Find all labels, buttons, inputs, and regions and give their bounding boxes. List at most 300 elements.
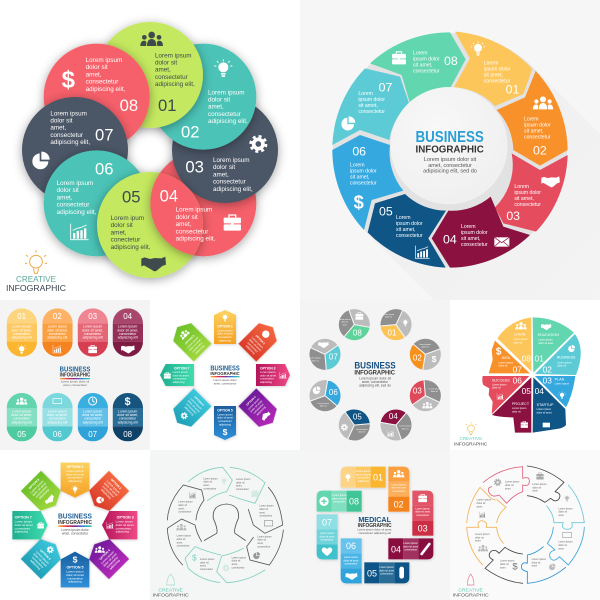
icon: chart: [415, 246, 430, 258]
panel: puzzle outline circle: [453, 466, 584, 599]
center title: amet, consectetur: [63, 383, 87, 387]
logo: [454, 422, 488, 446]
outline text: consectetur: [203, 487, 216, 490]
tab 01: dolor sit amet: [356, 473, 371, 476]
outline text: amet,: [178, 507, 185, 510]
tab 02: dolor sit amet: [391, 487, 406, 490]
text 06: Lorem ipsum: [57, 180, 93, 187]
head small text: [492, 338, 572, 414]
head numbers: 07: [513, 365, 522, 375]
tag option 1: consectetur: [218, 335, 232, 339]
segment labels: consectetur: [350, 180, 377, 186]
head small text: Lorem ipsum: [513, 338, 528, 341]
circle 02: [150, 44, 256, 150]
head numbers: [513, 353, 552, 396]
head labels: LOGIN: [514, 333, 526, 337]
tag option 6: consectetur: [31, 555, 45, 569]
center title: consectetur adipiscing elit: [358, 531, 391, 535]
circle group 07: [298, 327, 348, 380]
outline text: dolor sit: [232, 560, 241, 563]
puzzle text: amet: [475, 540, 481, 543]
tag option 1: OPTION 1: [66, 465, 84, 469]
icon: dollar: $: [62, 66, 75, 93]
text 07: dolor sit: [50, 118, 73, 125]
pill 07: dolor sit amet,: [82, 413, 103, 417]
tab 04: 04: [391, 544, 401, 554]
pill 02: consectetur: [49, 332, 67, 336]
text 05: 05: [122, 188, 141, 207]
head segment startup: [533, 377, 566, 433]
segment labels: Lorem: [484, 60, 498, 66]
tab 08: 08: [349, 496, 359, 506]
head labels: STARTUP: [537, 403, 554, 407]
icon: bulb: [214, 59, 232, 77]
text 08: Lorem ipsum: [86, 57, 122, 64]
logo: [153, 574, 189, 599]
tag option 1: [61, 463, 89, 498]
tag option 1: dolor sit amet: [217, 332, 233, 336]
tag option 3: [256, 364, 290, 386]
tag option 2: [238, 318, 282, 362]
text 06: 06: [95, 160, 114, 179]
outline text: Lorem ipsum: [203, 477, 218, 480]
center title: INFOGRAPHIC: [60, 373, 90, 379]
head labels: BUSINESS: [557, 356, 576, 360]
circle group 02: [403, 328, 451, 379]
tag option 8: adipiscing: [38, 488, 50, 500]
pill 02: dolor sit amet,: [47, 328, 68, 332]
text 06: adipiscing elit,: [57, 209, 97, 216]
outline text: consectetur: [178, 511, 191, 514]
tab 04: dolor sit amet: [403, 545, 418, 548]
logo: creative infographic: INFOGRAPHIC: [6, 283, 66, 293]
center title: [58, 514, 92, 536]
tag option 8: [168, 318, 212, 362]
tab 02: consectetur: [392, 490, 405, 493]
outline text: Lorem ipsum: [257, 535, 272, 538]
head small text: dolor sit: [513, 341, 522, 344]
tag option 3: dolor sit amet: [116, 523, 134, 527]
segment numbers: 04: [443, 232, 457, 246]
text 07: adipiscing elit,: [50, 139, 90, 146]
head small text: dolor sit: [557, 365, 566, 368]
tab 05: [364, 562, 409, 583]
outline text: amet,: [203, 484, 210, 487]
segment labels: ipsum dolor: [514, 190, 541, 196]
text 07: consectetur: [50, 132, 83, 139]
head numbers: 08: [522, 353, 531, 363]
puzzle text: amet: [558, 514, 564, 517]
icon: bulb: [471, 41, 485, 56]
tag option 1: [214, 310, 236, 344]
tag option 4: [84, 534, 129, 579]
pill 04: [113, 308, 143, 357]
center title: Lorem ipsum dolor sit amet,: [357, 528, 392, 532]
tag option 8: Lorem ipsum: [186, 335, 200, 349]
text 03: [185, 157, 253, 193]
outline text: [177, 477, 274, 571]
circle 04 overlap over 05: [144, 172, 203, 262]
text 07: [50, 110, 114, 146]
tag option 2: adipiscing: [100, 488, 112, 500]
numbers: 07: [329, 353, 338, 362]
numbers: [329, 328, 422, 421]
icon: briefcase: [224, 215, 241, 231]
pill 05: Lorem ipsum: [12, 409, 32, 413]
tag option 5: adipiscing: [68, 580, 82, 584]
tab 03: Lorem ipsum: [415, 507, 430, 510]
numbers: 01: [388, 329, 397, 338]
text 04: 04: [160, 186, 178, 205]
head labels: IDEA: [502, 356, 511, 360]
outline text: Lorem ipsum: [177, 535, 191, 538]
tag option 3: dolor sit amet: [260, 373, 276, 377]
tab 06: [341, 538, 362, 583]
text 08: consectetur: [86, 79, 118, 86]
tab 01: Lorem ipsum: [356, 470, 371, 473]
text 03: adipiscing elit,: [213, 186, 253, 193]
head segment idea: [489, 341, 530, 373]
person outline: [204, 504, 246, 541]
logo: INFOGRAPHIC: [454, 441, 488, 446]
numbers: 03: [413, 387, 422, 396]
segment labels: ipsum dolor: [350, 168, 377, 174]
logo: CREATIVE: [158, 587, 184, 593]
puzzle text: dolor sit: [532, 486, 541, 489]
tab 05: consectetur: [380, 573, 393, 576]
pill 05: adipiscing elit: [12, 420, 32, 424]
tab 02: 02: [394, 499, 404, 509]
center title: MEDICAL: [358, 515, 391, 524]
panel: head infographic: [454, 317, 581, 446]
icon: dollar: $: [354, 192, 364, 213]
center title: amet, consectetur: [362, 380, 389, 384]
pill 01: [7, 308, 37, 357]
segment labels: ipsum dolor: [413, 57, 440, 63]
tag option 3: adipiscing: [116, 530, 129, 534]
panel: option tags octagon small: [160, 310, 290, 440]
head segment success: [482, 376, 529, 414]
pill 04: dolor sit amet,: [117, 328, 138, 332]
pill 08: adipiscing elit: [118, 420, 138, 424]
tag option 6: dolor sit amet: [187, 399, 201, 413]
tag option 7: Lorem ipsum: [173, 370, 189, 374]
tag option 3: OPTION 3: [260, 366, 276, 370]
tag option 4: adipiscing: [255, 405, 267, 416]
pill 08: 08: [123, 430, 133, 439]
sector small text: dolor sit: [385, 316, 392, 319]
text 02: [181, 89, 248, 141]
tag option 8: adipiscing: [194, 344, 205, 355]
center title: [354, 360, 396, 388]
icon: mail: [494, 237, 509, 247]
tag option 1: adipiscing: [219, 338, 231, 342]
outline text: amet,: [177, 541, 183, 544]
segment labels: Lorem: [514, 184, 529, 190]
center title: [210, 365, 240, 385]
outline text: Lorem ipsum: [232, 556, 246, 559]
head small text: dolor sit amet: [537, 411, 552, 414]
tab 05: dolor sit amet: [379, 569, 394, 572]
puzzle text: [475, 481, 573, 569]
center title: [60, 365, 90, 387]
tag option 2: adipiscing: [245, 344, 256, 355]
head small text: Lorem ipsum: [557, 361, 572, 364]
puzzle text: Lorem ipsum: [505, 481, 519, 484]
text 01: 01: [158, 96, 177, 115]
outline text: amet,: [200, 565, 207, 568]
text 06: amet,: [57, 194, 73, 201]
pill 08: consectetur: [119, 417, 137, 421]
ring gap base: [333, 33, 567, 267]
tag option 4: Lorem ipsum: [100, 550, 115, 565]
tab 08: dolor sit amet: [332, 497, 347, 500]
segment labels: [350, 51, 551, 248]
segment labels: consectetur: [413, 69, 440, 75]
center title: Lorem ipsum dolor: [213, 378, 237, 382]
tag option 2: dolor sit amet: [103, 481, 119, 497]
head labels: PLAN: [555, 378, 565, 382]
logo: CREATIVE: [459, 436, 482, 441]
pill 02: adipiscing elit: [47, 336, 67, 340]
logo: creative infographic: [6, 250, 66, 293]
text 04: adipiscing elit,: [176, 235, 216, 242]
center title: INFOGRAPHIC: [415, 145, 484, 156]
outline text: amet,: [232, 563, 238, 566]
tag option 3: adipiscing: [260, 380, 272, 384]
outline text: consectetur: [200, 568, 213, 571]
text 06: dolor sit: [57, 187, 79, 194]
tag option 5: OPTION 5: [217, 409, 233, 413]
tag option 2: OPTION 2: [110, 478, 123, 491]
sector small text: Lorem ipsum: [309, 357, 321, 360]
pill 04: 04: [123, 312, 133, 321]
pill 07: consectetur: [84, 417, 102, 421]
head segment 08: [497, 317, 531, 371]
puzzle text: amet: [505, 487, 511, 490]
pill 02: Lorem ipsum: [48, 325, 67, 329]
outline text: dolor sit: [200, 561, 209, 564]
outline text: consectetur: [232, 566, 245, 569]
center title: INFOGRAPHIC: [210, 371, 240, 377]
text 06: [57, 160, 114, 216]
outline text: dolor sit: [203, 481, 212, 484]
tag option 4: dolor sit amet: [249, 399, 263, 413]
tab 06: consectetur: [345, 563, 358, 566]
segment 04: [432, 197, 530, 268]
segment labels: sit amet,: [396, 227, 415, 233]
text 01: [155, 52, 195, 115]
text 08: 08: [120, 96, 138, 115]
segment labels: Lorem: [350, 162, 365, 168]
sector small text: Lorem ipsum: [419, 343, 431, 346]
outline text: dolor sit: [236, 481, 245, 484]
segment labels: sit amet,: [461, 236, 480, 242]
puzzle text: Lorem ipsum: [475, 533, 489, 536]
pill 01: adipiscing elit: [12, 336, 32, 340]
head small text: dolor sit: [499, 365, 508, 368]
tag option 1: consectetur: [67, 476, 83, 480]
circle group 05: [327, 402, 380, 452]
tab 03: 03: [418, 523, 428, 533]
tag option 8: Lorem ipsum: [29, 479, 45, 494]
tag option 7: [12, 511, 48, 539]
tag option 6: Lorem ipsum: [189, 397, 204, 411]
logo: INFOGRAPHIC: [153, 593, 189, 599]
segment 05: [368, 194, 446, 268]
head small text: dolor sit: [492, 387, 501, 390]
text 03: amet,: [213, 171, 229, 178]
text 07: amet,: [50, 125, 66, 132]
text 05: amet,: [111, 229, 127, 236]
pill 08: $: [125, 396, 131, 408]
text 03: consectetur: [213, 179, 246, 186]
head segment business: [535, 334, 581, 375]
text 08: dolor sit: [86, 64, 108, 71]
tab 06: dolor sit amet: [344, 559, 359, 562]
panel: segmented circles infographic: [298, 298, 452, 452]
head segment education: [533, 317, 574, 373]
segment labels: ipsum dolor: [396, 221, 423, 227]
pill 03: Lorem ipsum: [83, 325, 103, 329]
tab 04: consectetur: [404, 549, 417, 552]
pill 06: 06: [53, 430, 62, 439]
sector small text: Lorem ipsum: [339, 318, 351, 321]
puzzle text: dolor sit: [558, 511, 567, 514]
tag option 6: Lorem ipsum: [35, 550, 50, 565]
tag option 6: OPTION 6: [193, 395, 205, 407]
segment 06: [332, 135, 403, 230]
tag option 4: Lorem ipsum: [247, 396, 261, 411]
tag option 2: consectetur: [247, 341, 259, 354]
tag option 7: consectetur: [15, 526, 30, 530]
center text: [423, 157, 477, 175]
icon: pie: [341, 116, 355, 130]
pill 02: 02: [53, 312, 62, 321]
circle group 01: [370, 298, 423, 348]
outline text: amet,: [257, 542, 264, 545]
tag option 1: Lorem ipsum: [217, 328, 233, 332]
tag option 1: OPTION 1: [217, 325, 233, 329]
text 04: consectetur: [176, 228, 208, 235]
center title: Lorem ipsum dolor sit: [359, 376, 391, 380]
puzzle text: dolor sit: [500, 563, 509, 566]
panel: overlapping circles infographic: [6, 22, 278, 293]
outline text: Lorem ipsum: [200, 558, 214, 561]
tab 07: 07: [322, 517, 332, 527]
pill 05: [7, 393, 37, 441]
tag option 4: consectetur: [252, 402, 265, 415]
circle 01: [97, 22, 203, 128]
pill 07: [78, 393, 108, 441]
pill 05: 05: [17, 430, 27, 439]
tag option 8: OPTION 8: [184, 333, 196, 345]
puzzle text: amet: [532, 565, 537, 568]
tag option 6: [21, 534, 66, 579]
segment labels: ipsum dolor: [524, 122, 551, 128]
tag option 6: [168, 388, 212, 432]
ring long shadow: [367, 67, 600, 400]
tab 07: consectetur: [321, 539, 334, 542]
pill 07: 07: [88, 430, 98, 439]
sector small text: dolor sit: [422, 346, 429, 349]
tag option 8: consectetur: [191, 341, 204, 353]
tab 01: [341, 467, 386, 488]
segment labels: consectetur: [461, 242, 488, 248]
segment numbers: 03: [506, 209, 520, 223]
tag option 2: [84, 471, 129, 516]
tag option 8: [21, 471, 66, 516]
tab 08: consectetur: [333, 501, 346, 504]
tag option 4: adipiscing: [108, 558, 121, 571]
tag option 5: consectetur: [218, 419, 232, 423]
text 03: 03: [185, 158, 204, 177]
tag option 7: [160, 364, 194, 386]
outline text: dolor sit: [259, 508, 268, 511]
segment labels: ipsum dolor: [461, 230, 488, 236]
outline text: Lorem ipsum: [236, 478, 250, 481]
tag option 6: adipiscing: [29, 558, 42, 571]
outline text: Lorem ipsum: [259, 505, 274, 508]
head small text: Lorem ipsum: [492, 383, 506, 386]
tab 08: Lorem ipsum: [332, 494, 347, 497]
head icons: $: [496, 347, 502, 358]
puzzle text: dolor sit: [532, 561, 541, 564]
text 01: consectetur: [155, 74, 188, 81]
text 02: dolor sit: [208, 97, 230, 104]
tag option 3: consectetur: [116, 526, 131, 530]
tag option 6: adipiscing: [184, 405, 195, 417]
pill 07: adipiscing elit: [83, 420, 103, 424]
outline icons: $: [192, 553, 197, 563]
tag option 7: Lorem ipsum: [15, 520, 32, 524]
segment numbers: 05: [379, 204, 393, 218]
tag option 6: OPTION 6: [39, 548, 52, 561]
tab 06: Lorem ipsum: [344, 556, 358, 559]
center title: INFOGRAPHIC: [354, 369, 395, 376]
sector small text: dolor sit: [431, 390, 438, 393]
tab 01: adipiscing: [358, 480, 369, 483]
pill 06: [42, 393, 73, 441]
center title: BUSINESS: [354, 360, 396, 370]
tag option 3: Lorem ipsum: [260, 370, 276, 374]
puzzle text: Lorem ipsum: [477, 499, 491, 502]
text 05: Lorem ipum: [111, 215, 144, 222]
panel: medical infographic: [317, 467, 433, 583]
head numbers: 05: [522, 386, 531, 396]
circle 04: [150, 150, 256, 256]
segment labels: sit amet,: [358, 103, 378, 109]
outline text: Lorem ipsum: [178, 501, 193, 504]
tag option 5: dolor sit amet: [217, 416, 233, 420]
tag option 7: OPTION 7: [15, 515, 32, 519]
text 06: consectetur: [57, 202, 89, 209]
outline text: amet,: [259, 511, 266, 514]
icons: [313, 313, 437, 437]
center text: adipisicing elit, sed do: [423, 169, 477, 175]
puzzle text: Lorem ipsum: [532, 558, 546, 561]
head small text: Lorem ipsum: [538, 339, 553, 342]
tag option 3: OPTION 3: [117, 515, 134, 519]
pill 06: Lorem ipsum: [48, 409, 67, 413]
text 04: Lorem ipsum: [176, 207, 212, 214]
center title: [357, 515, 392, 535]
text 01: adipiscing elit,: [155, 81, 195, 88]
tag option 4: OPTION 4: [98, 548, 111, 561]
pill 05: dolor sit amet,: [11, 413, 32, 417]
circle 07: [22, 97, 128, 203]
center title: [415, 129, 484, 156]
